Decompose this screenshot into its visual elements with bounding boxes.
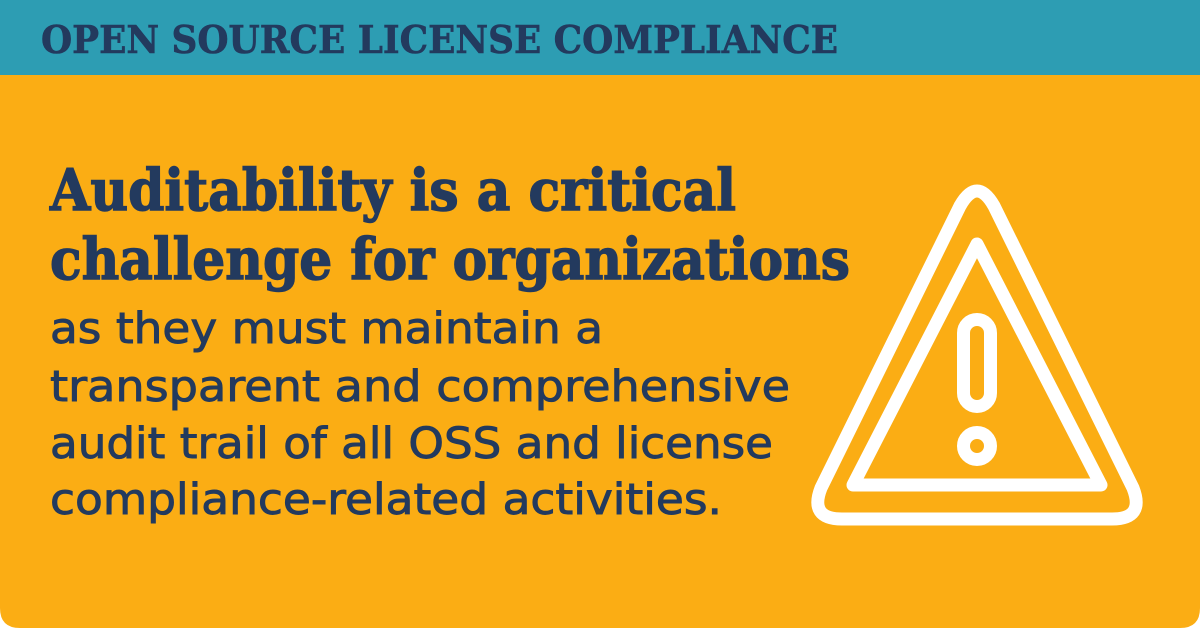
icon: warning triangle [818,191,1136,519]
body text: transparent and comprehensive [50,362,790,412]
body text [50,304,790,525]
body text: audit trail of all OSS and license [50,419,773,469]
body text: as they must maintain a [50,304,603,354]
header title: OPEN SOURCE LICENSE COMPLIANCE [41,17,838,62]
headline: Auditability is a critical [49,157,736,224]
headline [49,157,850,293]
headline: challenge for organizations [50,226,850,293]
header band [0,0,1200,75]
body text: compliance-related activities. [50,475,722,525]
